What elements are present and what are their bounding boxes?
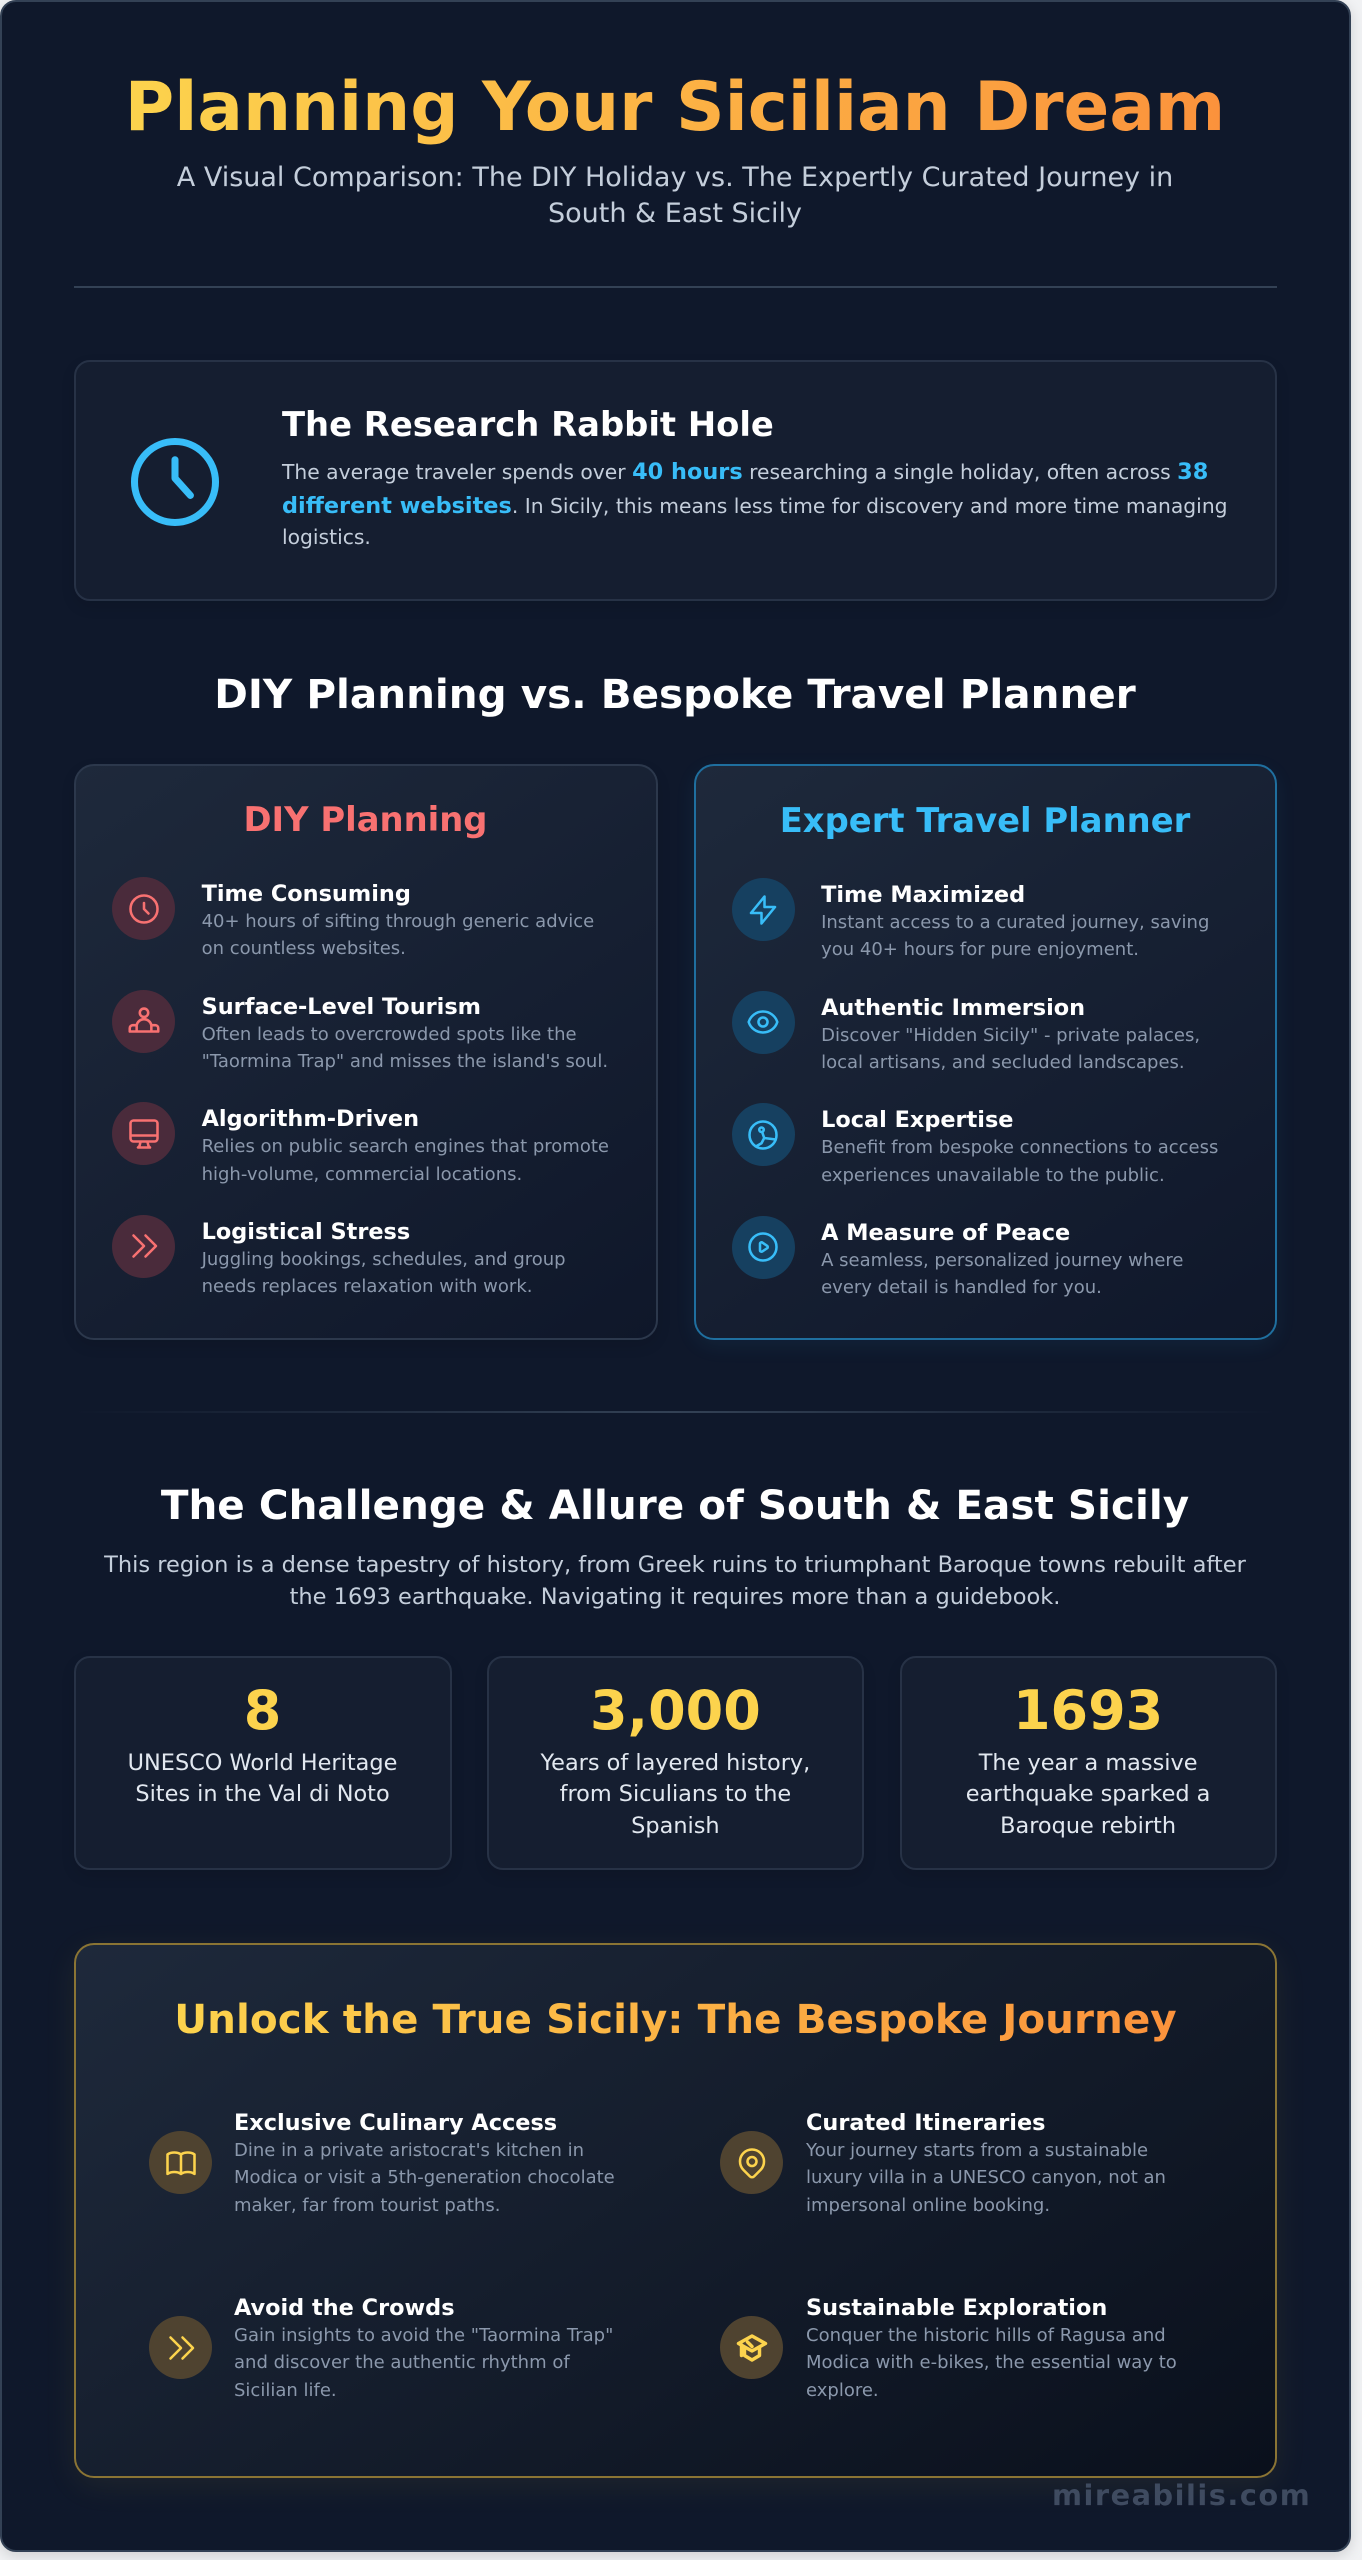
- stat card: 1693 earthquake: [900, 1656, 1277, 1870]
- icon: book: [149, 2131, 212, 2194]
- subtitle: [177, 162, 1173, 229]
- text: time consuming: on countless websites.: [202, 938, 406, 959]
- text: research description: The average traveler spends over 40 hours researching a single holiday, often across 38: [282, 459, 1208, 485]
- stat label: UNESCO sites: UNESCO World Heritage: [128, 1750, 397, 1776]
- text: local expertise: experiences unavailable to the public.: [821, 1165, 1165, 1186]
- text: a measure of peace: A Measure of Peace: [821, 1220, 1070, 1246]
- icon: eye: [732, 991, 794, 1054]
- text: sustainable exploration: Sustainable Exploration: [806, 2295, 1107, 2321]
- title: Planning Your Sicilian Dream: [125, 67, 1225, 146]
- icon: double chevron: [149, 2316, 212, 2379]
- text: local expertise: [821, 1107, 1218, 1186]
- text: algorithm-driven: Algorithm-Driven: [202, 1106, 419, 1132]
- text: avoid the crowds: Gain insights to avoid the "Taormina Trap": [234, 2325, 613, 2346]
- text: curated itineraries: [806, 2110, 1166, 2216]
- stat card: years of history: [487, 1656, 864, 1870]
- text: region intro: [104, 1552, 1246, 1610]
- text: authentic immersion: Discover "Hidden Sicily" - private palaces,: [821, 1025, 1200, 1046]
- text: research description: [282, 459, 1228, 549]
- text: logistical stress: Logistical Stress: [202, 1219, 410, 1245]
- panel: expert travel planner: [694, 764, 1277, 1340]
- text: logistical stress: needs replaces relaxation with work.: [202, 1276, 532, 1297]
- watermark: mireabilis.com: [1052, 2478, 1311, 2512]
- stat number: 1693: 1693: [1013, 1679, 1163, 1742]
- text: surface-level tourism: Surface-Level Tourism: [202, 994, 481, 1020]
- stat card: UNESCO sites: [74, 1656, 452, 1870]
- text: a measure of peace: A seamless, personalized journey where: [821, 1250, 1183, 1271]
- stat number: 8: 8: [244, 1679, 281, 1742]
- stat label: years of history: Spanish: [631, 1813, 720, 1839]
- text: exclusive culinary access: maker, far from tourist paths.: [234, 2195, 500, 2216]
- text: a measure of peace: [821, 1220, 1183, 1298]
- icon: bolt: [732, 878, 794, 941]
- stat label: UNESCO sites: Sites in the Val di Noto: [135, 1781, 390, 1807]
- text: logistical stress: [200, 1219, 566, 1297]
- text: authentic immersion: Authentic Immersion: [821, 995, 1085, 1021]
- item: algorithm-driven: [112, 1102, 609, 1185]
- text: curated itineraries: impersonal online booking.: [806, 2195, 1050, 2216]
- text: algorithm-driven: [202, 1106, 609, 1185]
- text: time consuming: Time Consuming: [202, 881, 411, 907]
- panel: DIY planning: [74, 764, 658, 1340]
- icon: academic cap: [720, 2316, 783, 2379]
- text: authentic immersion: [821, 995, 1200, 1073]
- stat label: earthquake: The year a massive: [979, 1750, 1197, 1776]
- text: time maximized: Time Maximized: [821, 882, 1025, 908]
- item: time consuming: [112, 877, 594, 959]
- item: a measure of peace: [732, 1216, 1183, 1298]
- item: avoid the crowds: [149, 2295, 613, 2401]
- icon: double chevron: [112, 1215, 175, 1278]
- text: region intro: This region is a dense tapestry of history, from Greek ruins to triumphant Baroque towns rebuilt after: [104, 1552, 1246, 1578]
- text: region intro: the 1693 earthquake. Navigating it requires more than a guidebook.: [290, 1584, 1060, 1610]
- heading: DIY planning: DIY Planning: [244, 800, 488, 839]
- text: local expertise: Local Expertise: [821, 1107, 1013, 1133]
- heading: unlock the true sicily: Unlock the True Sicily: The Bespoke Journey: [174, 1995, 1177, 2043]
- icon: clock: [112, 877, 175, 940]
- text: surface-level tourism: Often leads to overcrowded spots like the: [202, 1024, 577, 1045]
- text: time maximized: Instant access to a curated journey, saving: [821, 912, 1209, 933]
- icon: clock: [131, 438, 219, 526]
- text: exclusive culinary access: Dine in a private aristocrat's kitchen in: [234, 2140, 584, 2161]
- item: time maximized: [732, 878, 1209, 960]
- text: time consuming: [202, 881, 594, 959]
- text: research description: logistics.: [282, 525, 371, 549]
- icon: desktop: [112, 1102, 175, 1165]
- item: curated itineraries: [720, 2110, 1166, 2216]
- icon: globe: [732, 1103, 794, 1166]
- text: avoid the crowds: and discover the authentic rhythm of: [234, 2352, 570, 2373]
- text: avoid the crowds: [234, 2295, 613, 2401]
- stat label: earthquake: [966, 1750, 1210, 1839]
- panel: research rabbit hole: [74, 360, 1277, 601]
- item: authentic immersion: [732, 991, 1200, 1073]
- text: surface-level tourism: [202, 994, 608, 1072]
- text: avoid the crowds: Sicilian life.: [234, 2380, 337, 2401]
- icon: play: [732, 1216, 794, 1279]
- text: exclusive culinary access: [234, 2110, 615, 2216]
- item: surface-level tourism: [112, 990, 608, 1072]
- heading: challenge and allure: The Challenge & Allure of South & East Sicily: [161, 1481, 1189, 1529]
- text: surface-level tourism: "Taormina Trap" and misses the island's soul.: [202, 1051, 608, 1072]
- text: curated itineraries: luxury villa in a UNESCO canyon, not an: [806, 2167, 1166, 2188]
- text: local expertise: Benefit from bespoke connections to access: [821, 1137, 1218, 1158]
- text: sustainable exploration: Conquer the historic hills of Ragusa and: [806, 2325, 1166, 2346]
- text: a measure of peace: every detail is handled for you.: [821, 1277, 1102, 1298]
- text: algorithm-driven: high-volume, commercial locations.: [202, 1164, 522, 1185]
- text: curated itineraries: Your journey starts from a sustainable: [806, 2140, 1148, 2161]
- text: time maximized: [821, 882, 1209, 960]
- heading: research rabbit hole: The Research Rabbit Hole: [282, 405, 774, 444]
- stat label: years of history: from Siculians to the: [560, 1781, 791, 1807]
- item: logistical stress: [112, 1215, 566, 1297]
- text: algorithm-driven: Relies on public search engines that promote: [202, 1136, 609, 1157]
- item: sustainable exploration: [720, 2295, 1177, 2401]
- stat number: 3,000: 3,000: [590, 1679, 761, 1742]
- stat label: UNESCO sites: [128, 1750, 397, 1807]
- item: local expertise: [732, 1103, 1218, 1186]
- text: sustainable exploration: [806, 2295, 1177, 2401]
- stat label: years of history: Years of layered history,: [540, 1750, 810, 1776]
- text: logistical stress: Juggling bookings, schedules, and group: [202, 1249, 566, 1270]
- text: research description: different websites. In Sicily, this means less time for discovery and more time managing: [282, 493, 1228, 519]
- text: sustainable exploration: Modica with e-bikes, the essential way to: [806, 2352, 1177, 2373]
- text: exclusive culinary access: Exclusive Culinary Access: [234, 2110, 557, 2136]
- text: avoid the crowds: Avoid the Crowds: [234, 2295, 455, 2321]
- stat label: years of history: [540, 1750, 810, 1839]
- stat label: earthquake: Baroque rebirth: [1000, 1813, 1176, 1839]
- subtitle: South & East Sicily: [548, 198, 802, 229]
- text: time consuming: 40+ hours of sifting through generic advice: [202, 911, 594, 932]
- text: exclusive culinary access: Modica or visit a 5th-generation chocolate: [234, 2167, 615, 2188]
- text: authentic immersion: local artisans, and secluded landscapes.: [821, 1052, 1185, 1073]
- text: time maximized: you 40+ hours for pure enjoyment.: [821, 939, 1139, 960]
- panel: the bespoke journey: [74, 1943, 1277, 2478]
- subtitle: A Visual Comparison: The DIY Holiday vs. The Expertly Curated Journey in: [177, 162, 1173, 193]
- text: sustainable exploration: explore.: [806, 2380, 879, 2401]
- heading: expert travel planner: Expert Travel Planner: [780, 800, 1190, 840]
- item: exclusive culinary access: [149, 2110, 615, 2216]
- text: curated itineraries: Curated Itineraries: [806, 2110, 1045, 2136]
- heading: comparison: DIY Planning vs. Bespoke Travel Planner: [214, 670, 1136, 718]
- stat label: earthquake: earthquake sparked a: [966, 1781, 1210, 1807]
- icon: people: [112, 990, 175, 1053]
- icon: location pin: [720, 2131, 783, 2194]
